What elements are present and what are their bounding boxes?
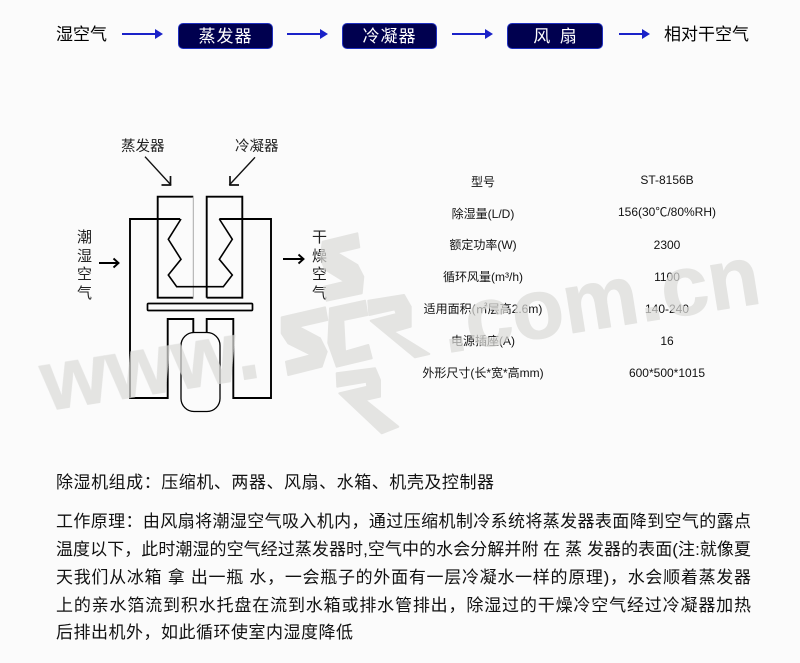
- arrow: to evaporator: [145, 157, 171, 185]
- row: rated power: 额定功率(W): [449, 238, 517, 252]
- refrigerant coil: [168, 219, 232, 287]
- flow: humid air label: 湿空气: [56, 25, 107, 44]
- row: dehumidification: 除湿量(L/D): [452, 207, 514, 221]
- spec table: [422, 173, 716, 380]
- watermark: www.: [33, 302, 265, 430]
- spec table: 156(30℃/80%RH): [618, 205, 716, 219]
- flow box: evaporator: [178, 23, 273, 49]
- row: dimensions: 外形尺寸(长*宽*高mm): [422, 366, 544, 380]
- flow box: fan: 风 扇: [533, 27, 577, 46]
- label: condenser: 冷凝器: [235, 139, 278, 155]
- flow box: evaporator: 蒸发器: [198, 27, 252, 46]
- text: components: 除湿机组成：压缩机、两器、风扇、水箱、机壳及控制器: [56, 473, 494, 492]
- label: evaporator: 蒸发器: [121, 139, 164, 155]
- text: working principle: 天我们从冰箱 拿 出一瓶 水，一会瓶子的外面有一层冷凝水一样的原理)，水会顺着蒸发器: [56, 568, 751, 587]
- spec table: 2300: [654, 238, 680, 252]
- spec table: 1100: [654, 270, 680, 284]
- arrow: dry air out: [283, 254, 304, 264]
- arrow: condenser to fan: [452, 29, 493, 39]
- text: working principle: 上的亲水箔流到积水托盘在流到水箱或排水管排出，除湿过的干燥冷空气经过冷凝器加热: [56, 596, 751, 615]
- flow box: condenser: 冷凝器: [362, 27, 416, 46]
- flow box: condenser: [342, 23, 437, 49]
- text: working principle: [56, 512, 751, 642]
- row: airflow: 循环风量(m³/h): [443, 270, 523, 284]
- label: dry air: 干燥空气: [312, 229, 327, 302]
- drip tray: [148, 304, 252, 310]
- row: model: 型号: [471, 175, 495, 189]
- arrow: humid air to evaporator: [122, 29, 163, 39]
- evaporator chamber left: [158, 197, 193, 298]
- flow box: fan: [507, 23, 603, 49]
- outer duct right: [207, 219, 271, 398]
- diagram: dehumidifier structure: [99, 156, 305, 412]
- watermark: .com.cn: [434, 228, 766, 372]
- text: working principle: 后排出机外，如此循环使室内湿度降低: [56, 623, 353, 642]
- label: humid air: 潮湿空气: [77, 229, 92, 302]
- spec table: ST-8156B: [640, 173, 694, 187]
- condenser chamber right: [207, 197, 242, 298]
- arrow: fan to dry air: [619, 29, 650, 39]
- row: area: 适用面积(㎡层高2.6m): [424, 302, 542, 316]
- text: working principle: 温度以下，此时潮湿的空气经过蒸发器时,空气中的水会分解并附 在 蒸 发器的表面(注:就像夏: [56, 540, 751, 559]
- arrow: to condenser: [229, 157, 255, 185]
- arrow: humid air in: [99, 258, 118, 268]
- row: socket: 电源插座(A): [451, 334, 515, 348]
- spec table: 600*500*1015: [629, 366, 705, 380]
- spec table: 16: [660, 334, 674, 348]
- outer duct left: [130, 219, 193, 398]
- spec table: 140-240: [645, 302, 689, 316]
- water tank: [181, 332, 220, 412]
- arrow: evaporator to condenser: [287, 29, 328, 39]
- text: working principle: 工作原理：由风扇将潮湿空气吸入机内，通过压缩机制冷系统将蒸发器表面降到空气的露点: [56, 512, 751, 531]
- flow: dry air label: 相对干空气: [664, 25, 749, 44]
